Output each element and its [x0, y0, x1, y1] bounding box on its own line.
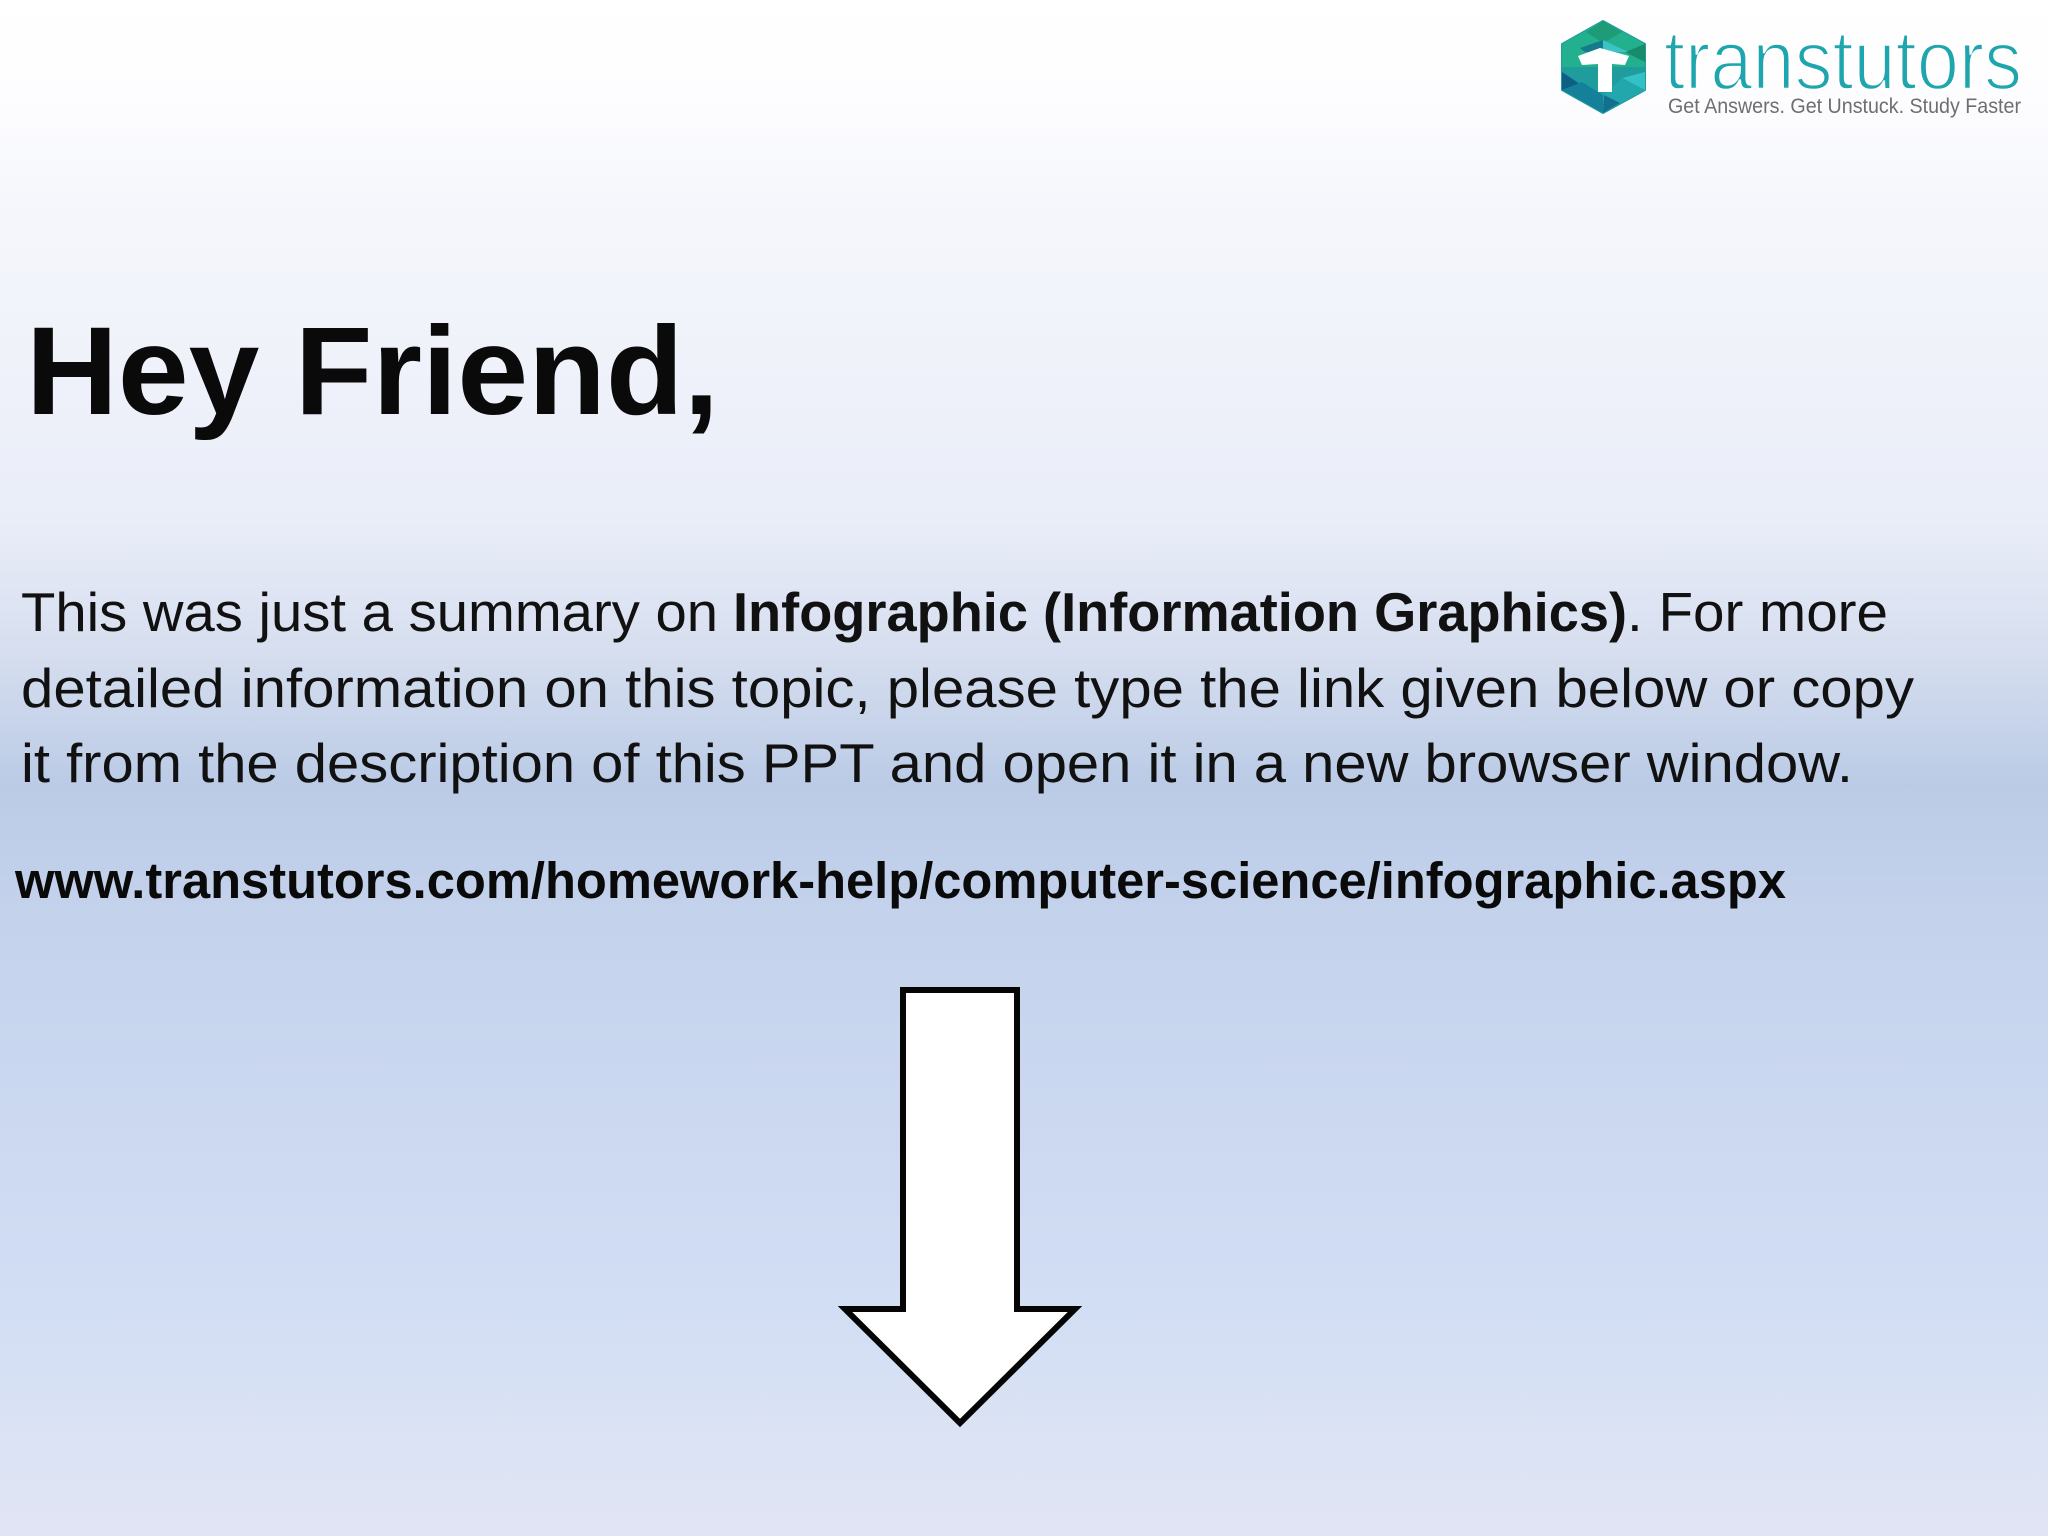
- text block: summary paragraph: . For more: [1627, 581, 1888, 643]
- icon: hexagon logo mark: [1562, 21, 1645, 113]
- logo: transtutors: [1562, 13, 2022, 118]
- text block: summary paragraph: This was just a summary on: [21, 581, 718, 643]
- text block: summary paragraph: detailed information on this topic, please type the link given below or copy: [21, 657, 1915, 719]
- text block: summary paragraph: it from the description of this PPT and open it in a new browser window.: [21, 732, 1853, 794]
- logo tagline: Get Answers. Get Unstuck. Study Faster: [1668, 94, 2021, 118]
- link URL: www.transtutors.com/homework-help/computer-science/infographic.aspx: [14, 852, 1786, 909]
- text block: summary paragraph: [21, 581, 1915, 794]
- title: Hey Friend,: [26, 302, 719, 441]
- text block: summary paragraph: Infographic (Information Graphics): [733, 581, 1627, 643]
- arrow: pointing down: [845, 990, 1075, 1423]
